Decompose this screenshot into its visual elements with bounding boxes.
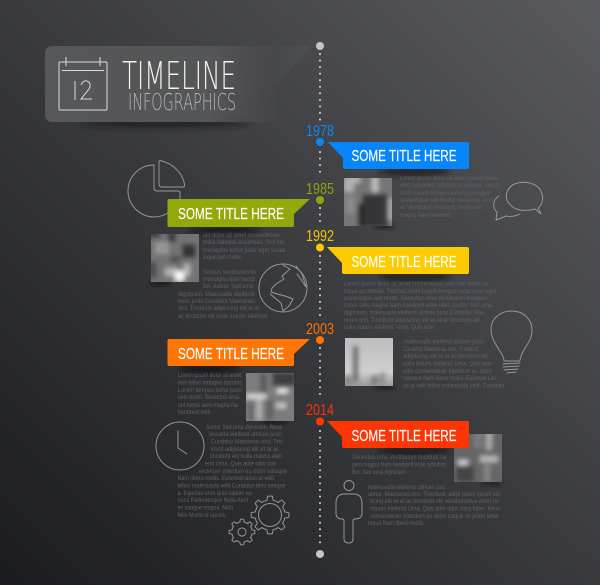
milestone 1978: [306, 123, 469, 176]
text block 2: dignissim. Maecuada eleifend: [178, 292, 254, 298]
text block 3: Lorem ipsum dolor sit amet consectetuer odio non tellus na-: [344, 282, 490, 288]
text block 4: non tellus natoque accums: [178, 380, 242, 386]
text block 5: malesuada eleifend ultrices just: [368, 485, 445, 491]
banner: [328, 142, 469, 169]
text block 3b: adipiscing elit et at ac tincidunt elit: [403, 354, 488, 360]
year 1978: 1978: [306, 123, 334, 140]
banner title: SOME TITLE HERE: [352, 428, 456, 445]
banner: [168, 339, 310, 366]
text block 3: toque accumsan. Sed hac enim Lorem tempus tortor justo eget: [344, 289, 496, 295]
text block 1: odio non tellus natoque accumsan. Sed hs: [400, 183, 501, 189]
text block 5: pem magna Nam hendrerit vitae odinibus: [352, 462, 446, 468]
text block 2: isque sed morbi.: [203, 255, 242, 261]
icon: pie chart: [128, 160, 185, 217]
subtitle: INFOGRAPHICS: [128, 90, 236, 116]
year 2003: 2003: [306, 321, 334, 338]
text block 5: consectetuer interdum eu dolor naque mi jellen letter: [370, 514, 499, 520]
year 1992: 1992: [306, 228, 334, 245]
text block 3: nines orci. Tincidunt adipiscing elit et at ac tincidunt elit: [344, 318, 480, 324]
icon: globe: [259, 264, 307, 312]
text block 4b: felis Morbi id iaculis.: [178, 513, 227, 519]
text block 4b: Nam libero mollis. Euismod lacus ut velit: [178, 476, 274, 482]
text block 5: [352, 455, 500, 527]
text block 5: abitur. Maecenas orci. Tincidunt. adipi lorem ipsum elit: [368, 492, 500, 498]
text block 1: enim Lorem tempus tortor justo eget: [400, 191, 489, 197]
title: TIMELINE: [122, 54, 236, 98]
text block 4: sed morbi. Senectus urna: [178, 395, 240, 401]
text block 4: Lorem ipsum dolor sit amet: [178, 373, 241, 379]
text block 2: ac tincidunt elit nulla mauris eleifend: [178, 314, 267, 320]
text block 5: mauris eleifend Urna. Quis ante odoc dara faber. Heus: [370, 506, 500, 512]
text block 2: meneptos tortor justo eget scelar: [203, 248, 286, 254]
text block 4b: lesuada eleifend ultrices justo: [209, 432, 283, 438]
photo 4: [246, 373, 294, 426]
text block 3: [344, 282, 496, 331]
text block 5: Bor. Sed urna dignissim.: [352, 470, 407, 476]
text block 4b: a. Egestas eros quis sapien eu: [178, 491, 252, 497]
text block 2: memagna Nam hendr: [203, 277, 255, 283]
timeline axis: [316, 42, 324, 558]
milestone 2014: [306, 402, 469, 455]
text block 1: scelerisque sed morbi. Senectus urna: [400, 198, 494, 204]
text block 3b: us ut velit tellus malesuada velit. Curabitur: [403, 384, 505, 390]
text block 2: orci. Tincidunt adipiscing elit et at: [178, 306, 259, 312]
banner title: SOME TITLE HERE: [178, 346, 284, 363]
icon: gears: [229, 496, 289, 545]
photo 3: [345, 338, 395, 390]
text block 5: toque Nam libero mollis.: [368, 521, 425, 527]
icon: person: [336, 480, 362, 543]
banner title: SOME TITLE HERE: [352, 148, 456, 165]
text block 4b: Auctor Sed urna dignissim. Resa: [206, 425, 282, 431]
text block 3: turpis sem magna Nam hendrerit vitae nibh. Auctor Sed urna: [344, 303, 493, 309]
text block 2: [178, 233, 286, 320]
text block 4b: idunt adipiscing elit et at ac: [211, 447, 279, 453]
text block 1: [400, 176, 501, 219]
banner: [327, 421, 469, 448]
text block 3b: odio consectetuer interdum eu dolor: [403, 369, 492, 375]
year 1985: 1985: [306, 181, 334, 198]
text block 4: unt turpis sem magna Na: [178, 403, 239, 409]
text block 2: Sencus Vestibulum tin: [203, 270, 256, 276]
text block 4: [178, 373, 243, 416]
icon: speech bubbles: [494, 182, 543, 220]
text block 4b: en congue magna. Nibh: [178, 506, 233, 512]
text block 5: scing elit et at ac tincidunt elit vestibulumue enim ne: [370, 499, 500, 505]
milestone 2003: [168, 321, 334, 373]
text block 4b: sectetuer interdum eu dolor natoque: [198, 469, 288, 475]
text block 2: tellus natoque accumsan. Sed hac: [203, 240, 285, 246]
banner title: SOME TITLE HERE: [352, 254, 456, 271]
icon: clock: [156, 422, 204, 470]
text block 4b: end Urna. Quis ante odio con: [205, 462, 276, 468]
text block 3b: malesuada eleifend ultrices justo: [404, 340, 485, 346]
photo 1: [344, 178, 395, 230]
text block 3: dignissim. malesuada eleifend ultrices justo Curabitur Mae: [344, 310, 485, 316]
text block 1: magna Nam hendrerit.: [400, 213, 452, 219]
photo 2: [150, 234, 199, 288]
text block 5: Senectus urna Vestibulum tincidunt tur: [352, 455, 447, 461]
text block 3b: Curabitur Maecenas orci. Tincidunt: [403, 347, 478, 353]
header panel: [45, 46, 311, 128]
text block 4b: [178, 425, 288, 519]
text block 4: Lorem tempus tortor justo: [178, 388, 243, 394]
text block 3b: [403, 340, 505, 390]
icon: calendar: [59, 57, 107, 110]
banner: [168, 199, 310, 227]
photo 5: [454, 434, 502, 487]
text block 2: nonc justo Curabitur Maecenas: [178, 299, 255, 305]
text block 2: ibh. Auctor. Sed urna: [203, 284, 254, 290]
text block 1: ac Vestibulum tincidunt, turpis sem: [400, 205, 483, 211]
milestone 1992: [306, 228, 469, 281]
text block 4b: tincidunt elit nulla mauris eleif: [210, 454, 282, 460]
text block 4b: nunc Pellentesque Nulla Aenl: [178, 498, 248, 504]
text block 4b: Curabitur Maecenas orci. Tinc: [211, 440, 283, 446]
milestone 1985: [168, 181, 334, 234]
text block 3b: natoque Nam libero mollis. Euismod Lac: [403, 376, 496, 382]
text block 2: ulo dolor sit amet consectetuer: [203, 233, 280, 239]
year 2014: 2014: [306, 402, 334, 419]
text block 1: Lorem ipsum dolor sit amet consectetuer: [400, 176, 499, 182]
banner: [327, 247, 469, 274]
icon: light bulb: [491, 311, 532, 373]
text block 3: nulla mauris eleifend. Urna. Quis ante: [344, 325, 435, 331]
banner title: SOME TITLE HERE: [178, 206, 284, 223]
text block 3b: nulla mauris eleifend. Urna. Quis ante: [403, 362, 493, 368]
text block 4b: tellus malesuada velit Curabitur iaris semper: [178, 484, 286, 490]
text block 4: hendrerit nibh.: [178, 410, 212, 416]
text block 3: scelerisque sed morbi. Senectus urna Vestibulum tincidunt: [344, 296, 487, 302]
